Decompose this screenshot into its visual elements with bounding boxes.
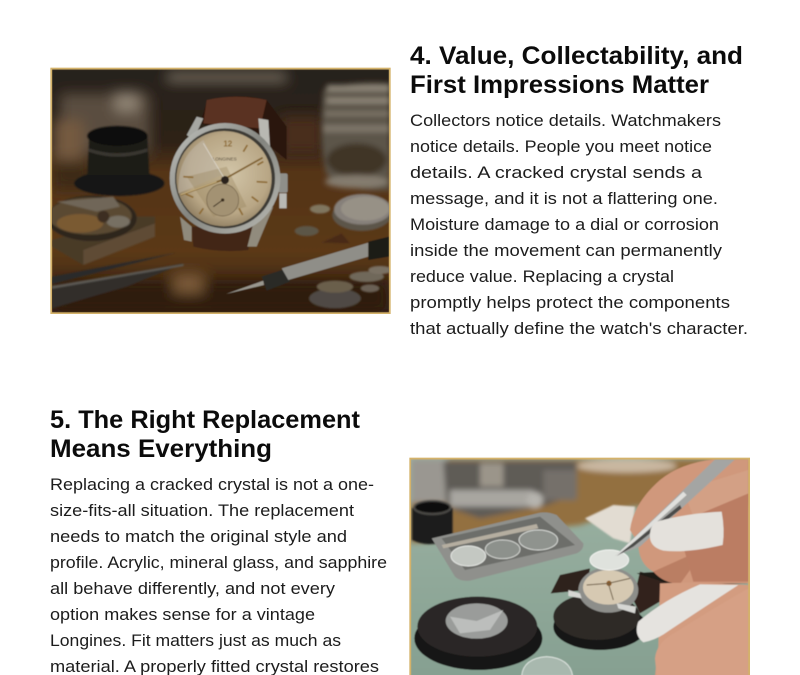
heading 5 — [50, 406, 361, 463]
photo: vintage Longines watch on workbench — [47, 68, 392, 314]
upper hand — [630, 459, 748, 584]
body text 5: needs to match the original style and — [50, 528, 347, 546]
photo: vintage Longines watch on workbench: 12 — [223, 140, 233, 149]
body text 5: size-fits-all situation. The replacement — [50, 502, 354, 520]
section 5: the right replacement — [50, 406, 750, 675]
body text 5 — [50, 476, 387, 675]
watch case — [170, 123, 280, 234]
bottom crystal — [522, 657, 573, 675]
body text 4: that actually define the watch's character. — [410, 320, 748, 338]
tweezers — [615, 459, 735, 556]
movement block — [47, 196, 155, 265]
jar — [321, 82, 390, 191]
photo: vintage Longines watch on workbench: LONGINES — [213, 157, 237, 162]
strap bottom — [192, 227, 253, 251]
body text 5: option makes sense for a vintage — [50, 606, 315, 624]
body text 5: Replacing a cracked crystal is not a one- — [50, 476, 374, 494]
tweezers — [52, 253, 184, 308]
section 4: value and collectability — [47, 42, 748, 338]
screwdriver — [226, 237, 389, 294]
heading 5: Means Everything — [50, 435, 272, 463]
crystal being lifted — [590, 550, 629, 570]
photo: watchmaker fitting a replacement crystal — [409, 458, 750, 675]
body text 5: Longines. Fit matters just as much as — [50, 632, 341, 650]
left pad with metal disc — [414, 597, 542, 670]
heading 4 — [410, 42, 743, 99]
body text 4: details. A cracked crystal sends a — [410, 164, 703, 182]
heading 5: 5. The Right Replacement — [50, 406, 361, 434]
black ring — [412, 501, 453, 544]
body text 4: Collectors notice details. Watchmakers — [410, 112, 721, 130]
lugs and case — [187, 117, 203, 140]
body text 4: message, and it is not a flattering one. — [410, 190, 718, 208]
small parts — [295, 205, 392, 308]
right pad — [553, 593, 647, 650]
body text 4: Moisture damage to a dial or corrosion — [410, 216, 719, 234]
heading 4: First Impressions Matter — [410, 71, 709, 99]
heading 4: 4. Value, Collectability, and — [410, 42, 743, 70]
subdial — [207, 184, 239, 216]
dial — [176, 131, 272, 226]
body text 4: promptly helps protect the components — [410, 294, 730, 312]
body text 4: reduce value. Replacing a crystal — [410, 268, 674, 286]
body text 4 — [410, 112, 748, 338]
tray of crystals — [432, 512, 583, 581]
body text 4: inside the movement can permanently — [410, 242, 723, 260]
case back coin — [332, 194, 391, 231]
body text 5: all behave differently, and not every — [50, 580, 336, 598]
small watch — [551, 567, 748, 613]
body text 4: notice details. People you meet notice — [410, 138, 712, 156]
hands — [181, 158, 263, 195]
markers — [183, 145, 267, 215]
white cloth — [585, 505, 635, 543]
lower hand — [637, 583, 748, 675]
loupe — [74, 126, 164, 196]
gloved finger — [650, 512, 724, 551]
body text 5: profile. Acrylic, mineral glass, and sapphire — [50, 554, 387, 572]
strap top — [202, 102, 287, 160]
